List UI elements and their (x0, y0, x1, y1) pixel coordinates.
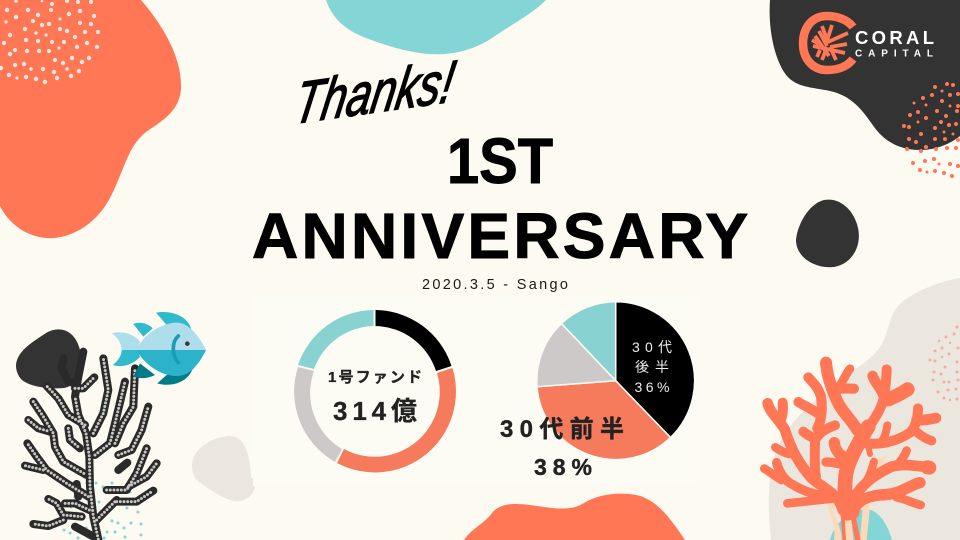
pie coral segment (537, 381, 670, 460)
coral blob top left (0, 0, 181, 238)
logo wordmark: CORAL (855, 27, 934, 48)
beige blob left (192, 436, 256, 501)
pie label: late thirties (632, 339, 672, 395)
pie label: early thirties (500, 416, 624, 480)
pie label: early thirties: 30代前半 (500, 416, 624, 443)
dots top right (902, 82, 960, 178)
dots under grey coral (62, 482, 142, 540)
pie label: late thirties: 36% (634, 379, 670, 395)
donut label (328, 369, 422, 426)
coral right (764, 363, 936, 540)
chart background panel (253, 296, 698, 486)
icon: fish (112, 312, 206, 385)
logo: Coral Capital (803, 16, 934, 70)
dots on coral blob (0, 0, 100, 84)
donut black segment (376, 310, 452, 371)
dark blob right (796, 200, 859, 267)
title: 1ST (447, 125, 553, 197)
title: ANNIVERSARY (252, 200, 748, 272)
base of coral (827, 457, 892, 540)
donut grey segment (294, 367, 342, 462)
logo: Coral Capital: CAPITAL (855, 48, 933, 60)
grey sea coral (25, 352, 157, 539)
pie grey segment (537, 324, 616, 387)
dark blob left (16, 329, 81, 388)
pie label: early thirties: 38% (534, 454, 592, 480)
title (252, 125, 748, 272)
dots on beige blob (928, 326, 960, 401)
handwritten thanks: Thanks! (290, 47, 460, 137)
logo ring (803, 16, 853, 70)
pie label: late thirties: 後半 (635, 359, 669, 375)
date subtitle: 2020.3.5 - Sango (422, 277, 568, 293)
donut chart (294, 310, 456, 472)
beige blob right (769, 278, 960, 540)
dark blob top right (770, 0, 960, 150)
teal blob top (326, 0, 546, 54)
donut label: 314億 (333, 396, 417, 426)
donut teal segment (298, 310, 374, 369)
coral blob bottom (464, 494, 685, 540)
pie chart (537, 302, 695, 460)
logo coral mark (812, 25, 848, 60)
pie label: late thirties: 30代 (632, 339, 672, 355)
pie black segment (616, 302, 695, 438)
donut coral segment (337, 368, 456, 472)
pie teal segment (562, 302, 616, 381)
donut label: 1号ファンド (328, 369, 422, 386)
